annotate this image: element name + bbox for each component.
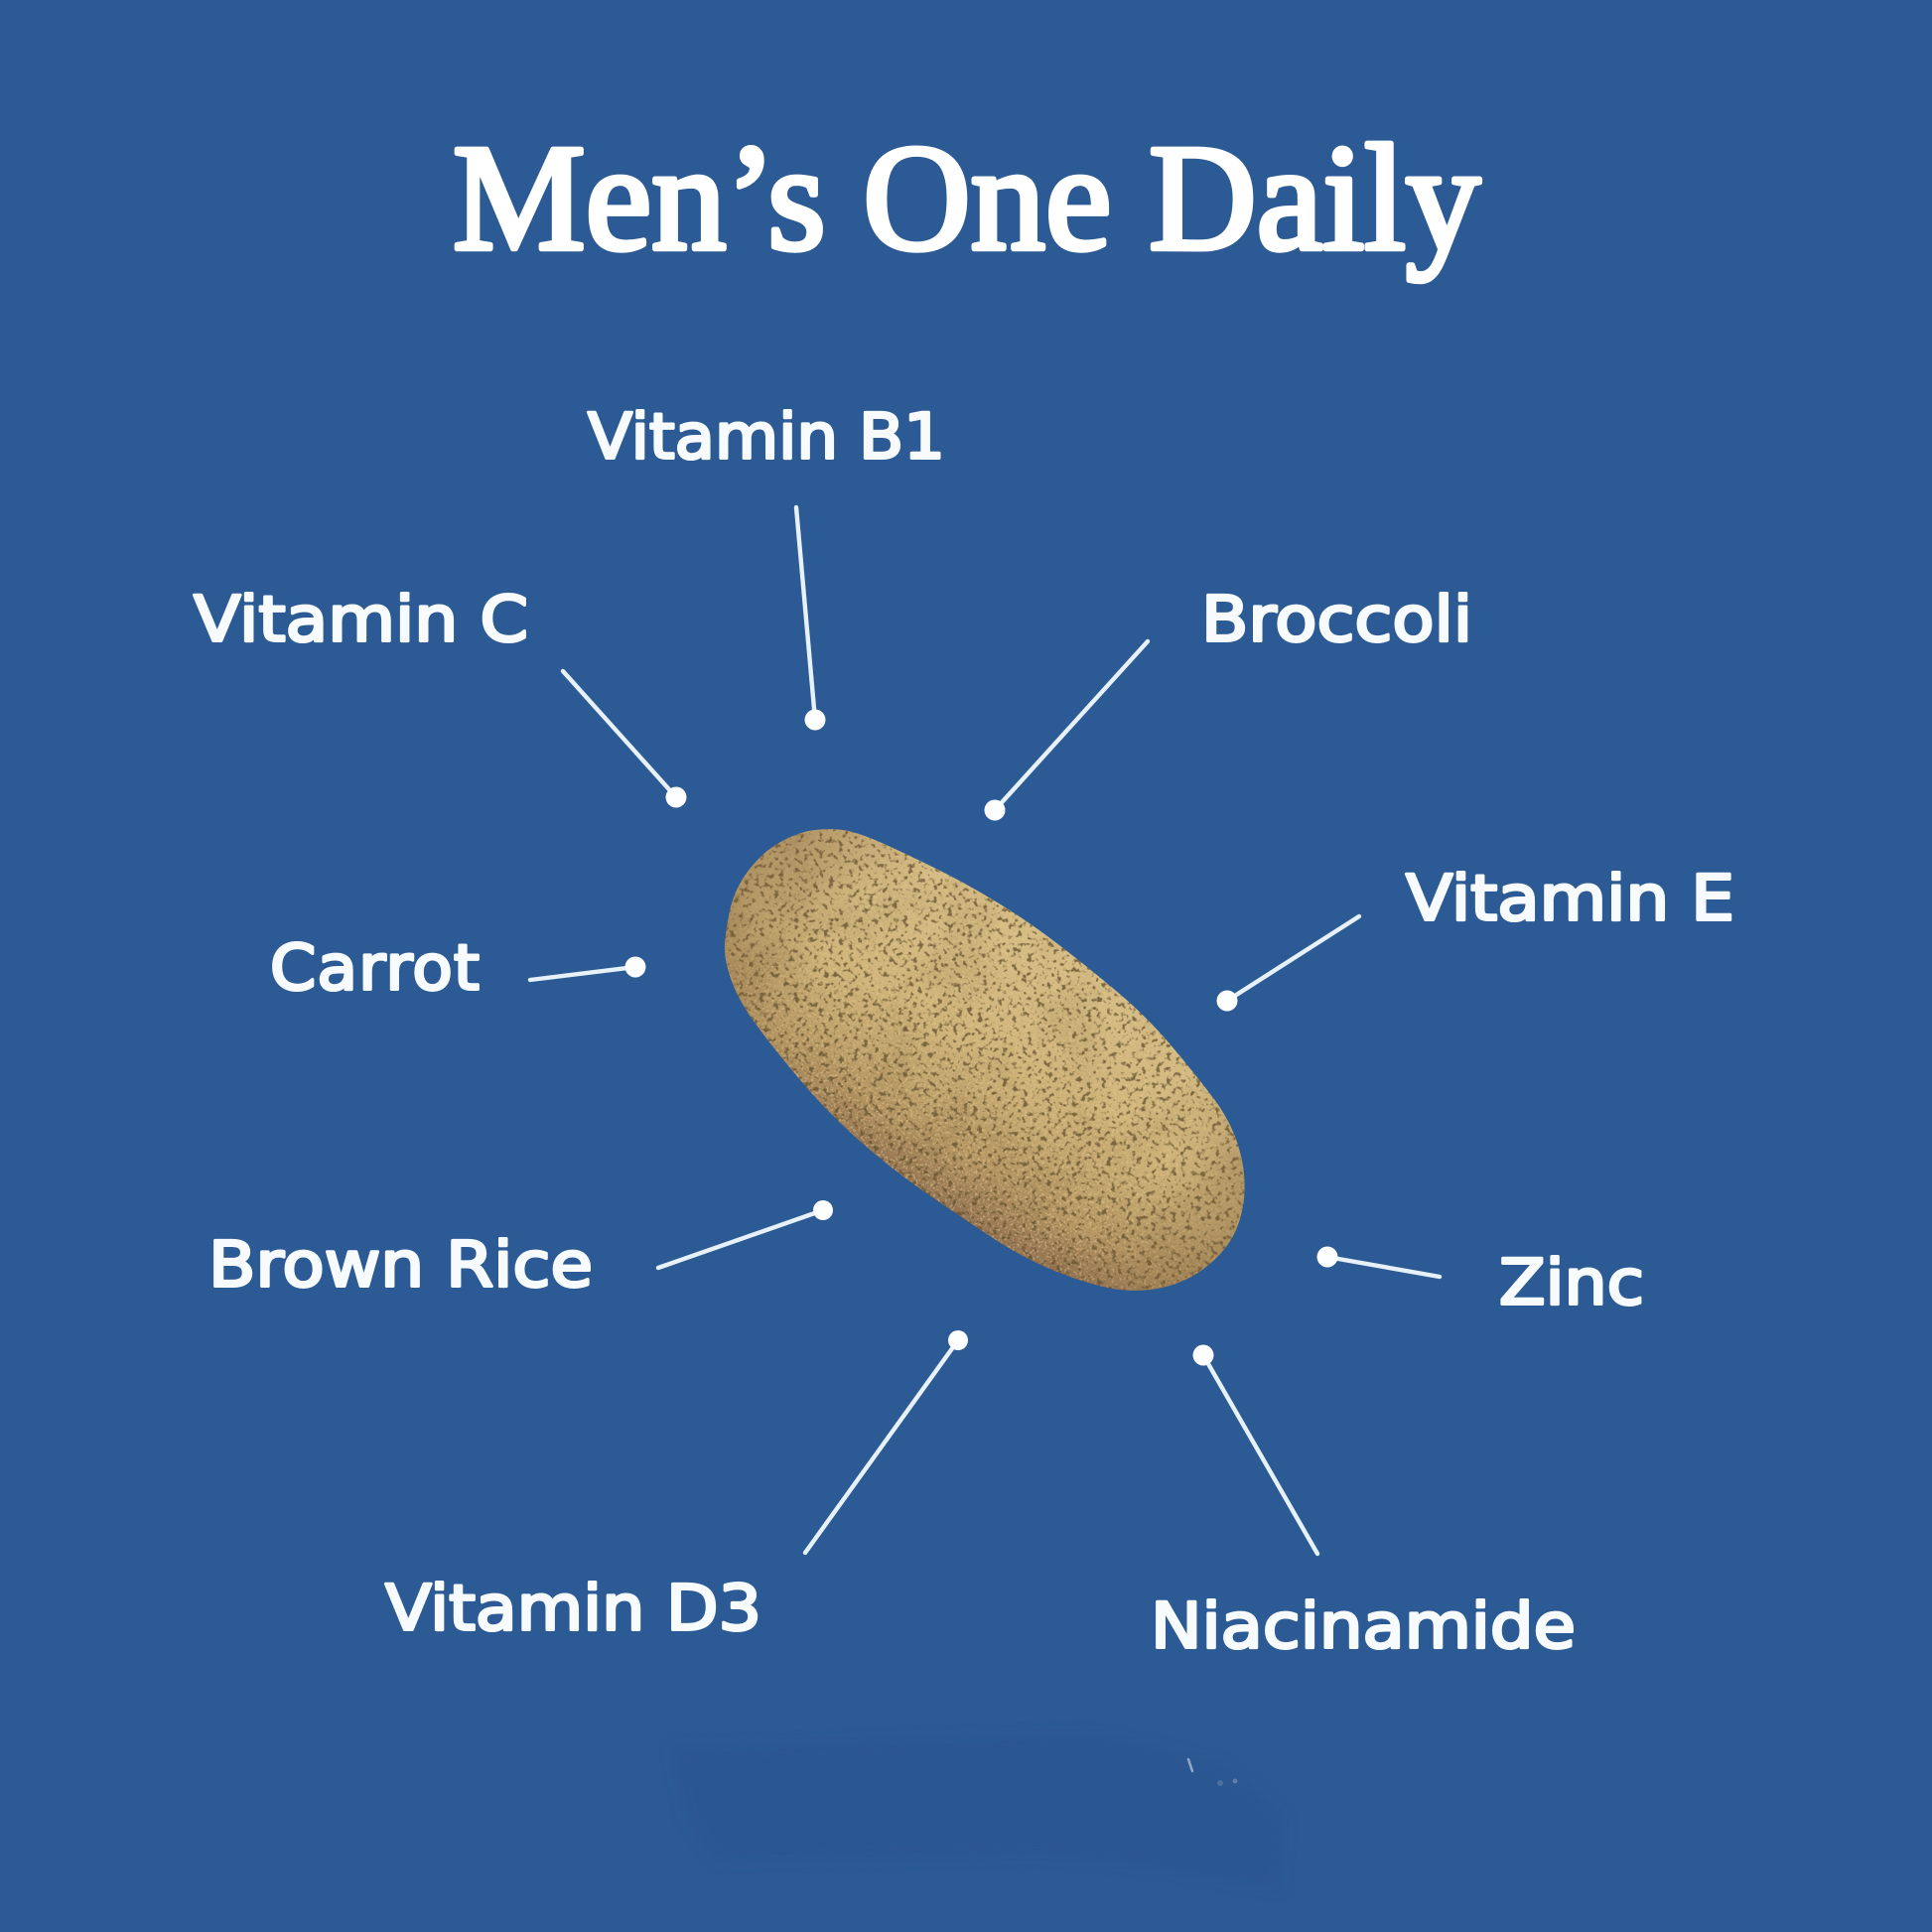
label: Vitamin B1: [588, 401, 945, 473]
leader line: [1193, 1344, 1317, 1554]
leader line: [530, 957, 645, 980]
leader line: [805, 1330, 968, 1553]
label: Niacinamide: [1151, 1590, 1576, 1662]
faint shadow artifact: [670, 1732, 1286, 1891]
title: Men’s One Daily: [453, 115, 1480, 282]
callout: Brown Rice: [208, 1200, 833, 1301]
leader line: [985, 641, 1148, 820]
label: Vitamin E: [1406, 862, 1734, 935]
callout: Zinc: [1316, 1247, 1644, 1318]
callout: Vitamin B1: [588, 401, 945, 731]
leader line: [563, 671, 687, 808]
callout: Vitamin D3: [385, 1330, 968, 1644]
label: Vitamin D3: [385, 1573, 761, 1644]
leader line: [658, 1200, 833, 1268]
label: Vitamin C: [194, 584, 528, 655]
leader line: [1316, 1247, 1440, 1277]
label: Brown Rice: [208, 1229, 593, 1301]
label: Zinc: [1499, 1247, 1644, 1318]
callout: Vitamin C: [194, 584, 687, 808]
leader line: [1217, 916, 1359, 1011]
label: Broccoli: [1201, 584, 1472, 655]
supplement tablet: [715, 819, 1256, 1301]
callout: Niacinamide: [1151, 1344, 1576, 1662]
label: Carrot: [270, 931, 481, 1005]
callout: Vitamin E: [1217, 862, 1734, 1011]
infographic poster: [193, 141, 1731, 1786]
callout: Broccoli: [985, 584, 1472, 820]
callout: Carrot: [270, 931, 645, 1005]
leader line: [796, 507, 826, 731]
